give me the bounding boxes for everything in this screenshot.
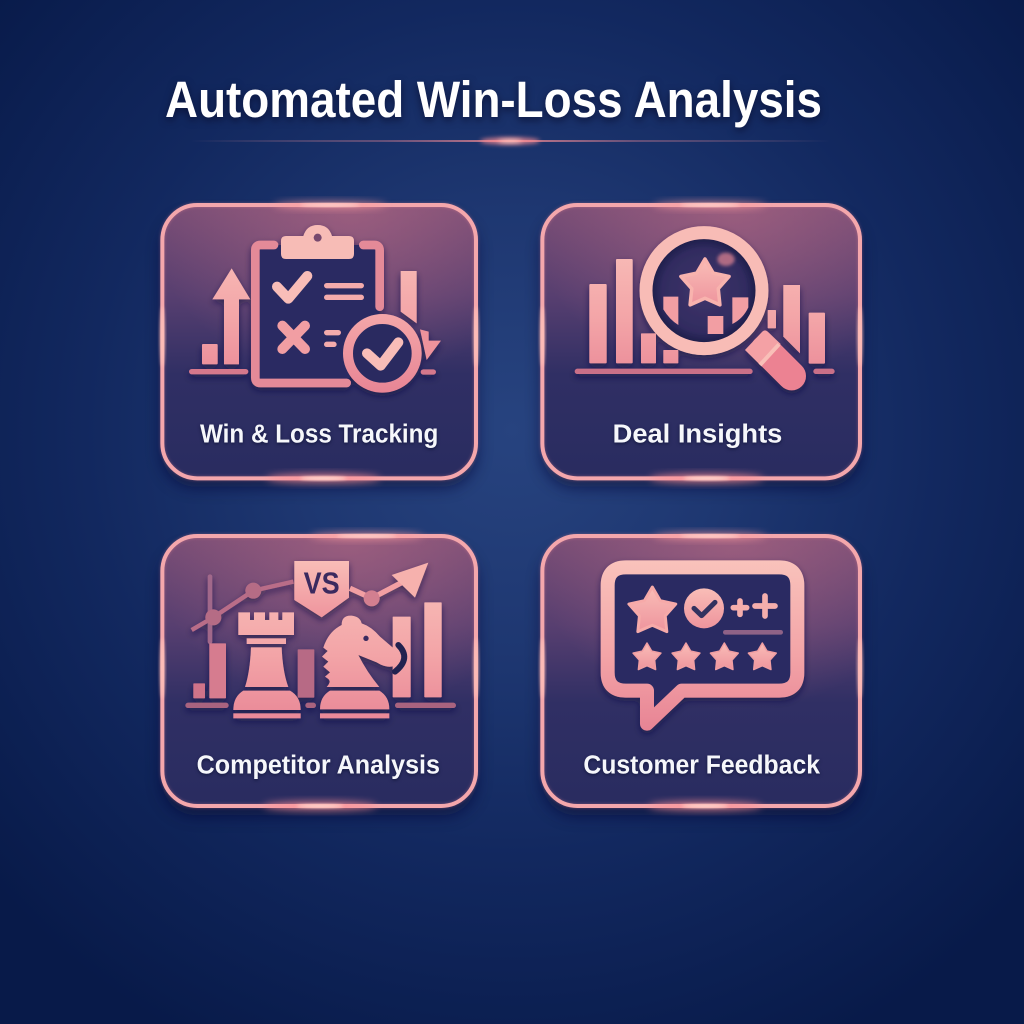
card frame [540, 201, 862, 487]
bar chart [589, 259, 825, 364]
title: Automated Win-Loss Analysis [165, 71, 822, 128]
label: Competitor Analysis [197, 749, 440, 779]
icon: clipboard with check, cross and trend arrows [192, 225, 441, 388]
card frame [160, 201, 478, 487]
icon: check badge [348, 319, 417, 388]
icon: magnifier over bar chart [577, 233, 832, 376]
icon: large star [629, 587, 676, 632]
icon: down arrow head [420, 329, 441, 360]
label: Customer Feedback [583, 749, 820, 779]
chart baseline [188, 697, 453, 713]
icon: rating stars [633, 643, 776, 670]
trend line right [350, 580, 407, 598]
badge check [367, 342, 398, 366]
chart baseline [577, 363, 832, 379]
axis [203, 577, 217, 642]
title divider [190, 138, 830, 144]
badge check [694, 602, 715, 616]
rating line [725, 625, 781, 639]
list lines [327, 286, 361, 344]
trend nodes [205, 583, 380, 625]
icon: star [681, 259, 729, 305]
icon: clipboard board [255, 245, 379, 383]
chart baseline [192, 364, 433, 380]
icon: clipboard outline [255, 245, 380, 383]
icon: speech bubble with ratings [608, 567, 797, 724]
knight eye [363, 636, 369, 641]
panel: competitor analysis [160, 532, 478, 815]
icon: clipboard clip [281, 225, 354, 259]
bar chart [193, 602, 442, 698]
icon: arrow head [392, 563, 428, 598]
panel: deal insights [540, 201, 862, 487]
icon: sparkles [733, 596, 775, 616]
panel: win and loss tracking [160, 201, 478, 487]
icon: up arrow [212, 268, 250, 364]
lens glint [717, 253, 735, 266]
knight nose shadow [395, 645, 404, 672]
icon: speech bubble [608, 567, 797, 724]
icon: check badge [684, 588, 724, 628]
icon: small bar [202, 344, 218, 364]
card frame [540, 532, 862, 815]
icon: knight [320, 616, 399, 718]
icon: magnifier handle [745, 330, 792, 376]
lens bars [663, 297, 748, 334]
icon: magnifier lens [651, 237, 757, 344]
icon: vs shield [294, 561, 349, 617]
icon: chess pieces and trend chart [188, 561, 453, 718]
icon: cross mark [282, 326, 305, 349]
card frame [160, 532, 478, 815]
icon: rook [233, 612, 301, 718]
label: Deal Insights [613, 418, 782, 448]
panel: customer feedback [540, 532, 862, 815]
clip hole [314, 234, 322, 242]
magnifier ring [646, 233, 762, 349]
icon: check mark [277, 276, 307, 299]
label: Win & Loss Tracking [200, 418, 438, 448]
vs text: VS [304, 567, 340, 601]
icon: falling bar [401, 271, 417, 323]
trend line [192, 582, 293, 630]
